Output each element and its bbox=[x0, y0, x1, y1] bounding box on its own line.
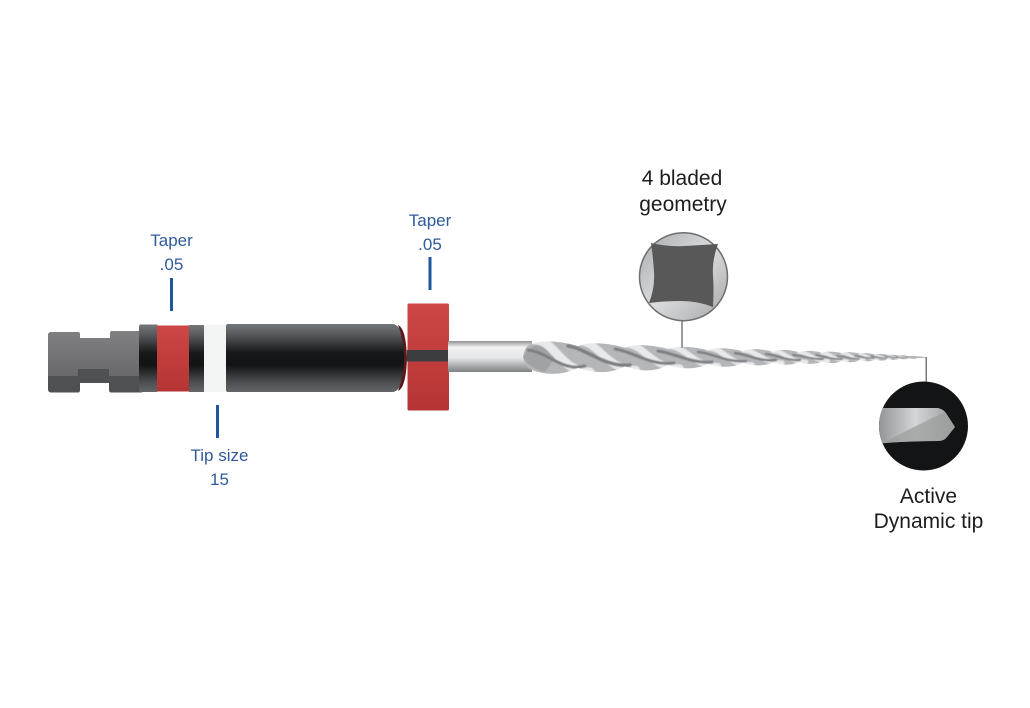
stopper: dark band bbox=[407, 350, 449, 362]
callout: 4 bladed cross-section bbox=[640, 233, 728, 321]
label: 4 bladed geometry: 4 bladed bbox=[642, 167, 722, 190]
handle: gray band bbox=[189, 325, 204, 392]
label: tip size 15 bbox=[191, 446, 248, 489]
label: taper .05 (stopper): .05 bbox=[418, 235, 442, 254]
label: tip size 15: Tip size bbox=[191, 446, 248, 465]
connector: geometry callout line bbox=[681, 320, 683, 348]
label: active dynamic tip bbox=[874, 485, 983, 533]
label: taper .05 (handle) bbox=[150, 231, 193, 274]
pointer: tip size bbox=[216, 405, 219, 438]
file instrument bbox=[48, 304, 930, 410]
pointer: stopper taper bbox=[428, 257, 432, 290]
handle: black collar bbox=[139, 324, 158, 392]
handle: dark red inner rim bbox=[398, 325, 407, 391]
callout: active dynamic tip bbox=[875, 382, 968, 470]
label: taper .05 (handle): .05 bbox=[160, 255, 183, 274]
label: tip size 15: 15 bbox=[210, 470, 229, 489]
handle: black body bbox=[226, 324, 405, 392]
connector: tip callout line bbox=[926, 357, 927, 383]
label: active dynamic tip: Active bbox=[900, 485, 957, 508]
pointer: handle taper bbox=[170, 278, 173, 311]
label: 4 bladed geometry bbox=[639, 167, 727, 216]
label: active dynamic tip: Dynamic tip bbox=[874, 510, 983, 533]
label: taper .05 (handle): Taper bbox=[150, 231, 193, 250]
taper ring: red bbox=[157, 326, 189, 392]
handle: gray latch shank bbox=[48, 331, 142, 392]
shaft bbox=[448, 341, 532, 372]
label: taper .05 (stopper) bbox=[409, 211, 452, 254]
stopper: red ring bbox=[408, 304, 449, 410]
flutes bbox=[523, 342, 926, 374]
tip size ring: white bbox=[204, 325, 226, 392]
label: taper .05 (stopper): Taper bbox=[409, 211, 452, 230]
label: 4 bladed geometry: geometry bbox=[639, 193, 727, 216]
